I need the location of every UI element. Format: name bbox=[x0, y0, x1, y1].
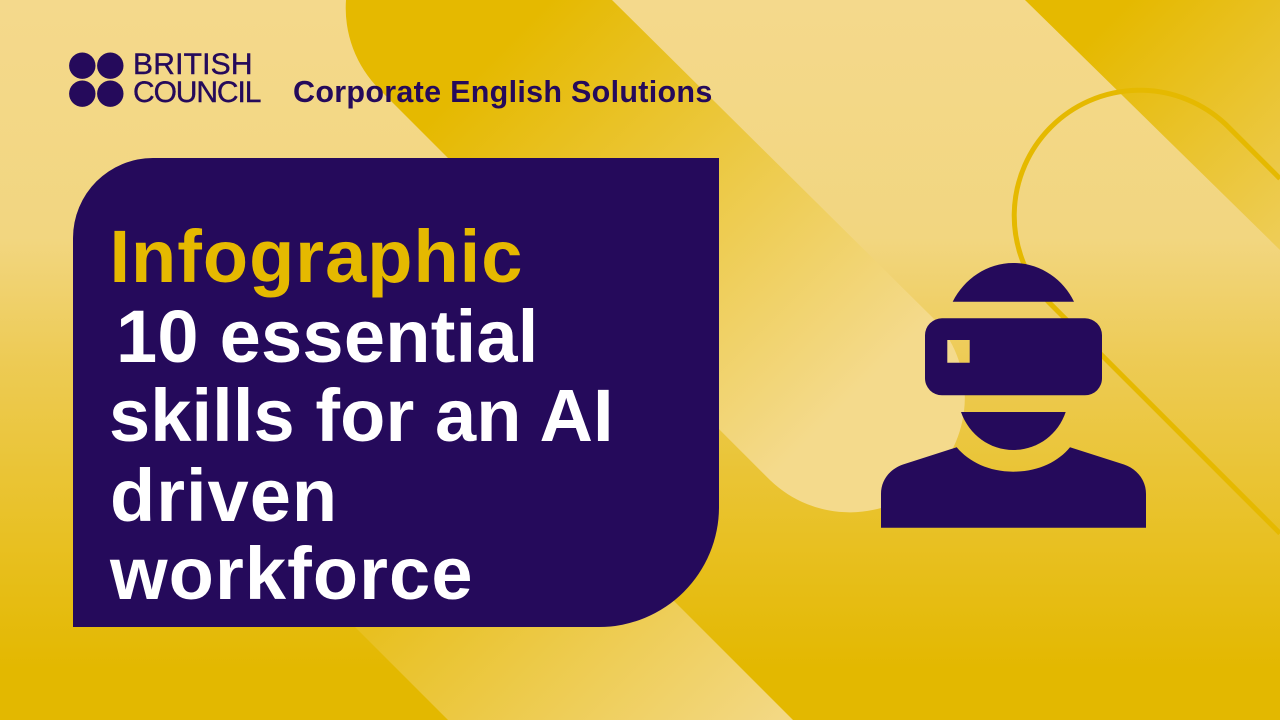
head top bbox=[953, 263, 1074, 302]
title: 10 essential skills for an AI driven workforce: skills for an AI bbox=[109, 374, 614, 457]
shoulders bbox=[881, 447, 1146, 528]
logo wordmark: BRITISH bbox=[133, 48, 253, 81]
subheading: Corporate English Solutions: Corporate English Solutions bbox=[293, 75, 713, 109]
title: Infographic: Infographic bbox=[110, 215, 523, 298]
icon: person wearing VR headset bbox=[881, 263, 1146, 528]
logo wordmark: COUNCIL bbox=[133, 76, 260, 108]
title: 10 essential skills for an AI driven workforce: driven bbox=[110, 454, 338, 537]
logo dots bbox=[69, 52, 124, 107]
headset with window bbox=[925, 318, 1102, 395]
logo: British Council bbox=[69, 48, 261, 108]
logo wordmark bbox=[133, 48, 261, 108]
title: 10 essential skills for an AI driven workforce: workforce bbox=[110, 532, 474, 615]
title: 10 essential skills for an AI driven workforce bbox=[109, 295, 614, 615]
title panel bbox=[73, 158, 719, 627]
chin bbox=[961, 412, 1066, 450]
title: 10 essential skills for an AI driven workforce: 10 essential bbox=[116, 295, 539, 378]
